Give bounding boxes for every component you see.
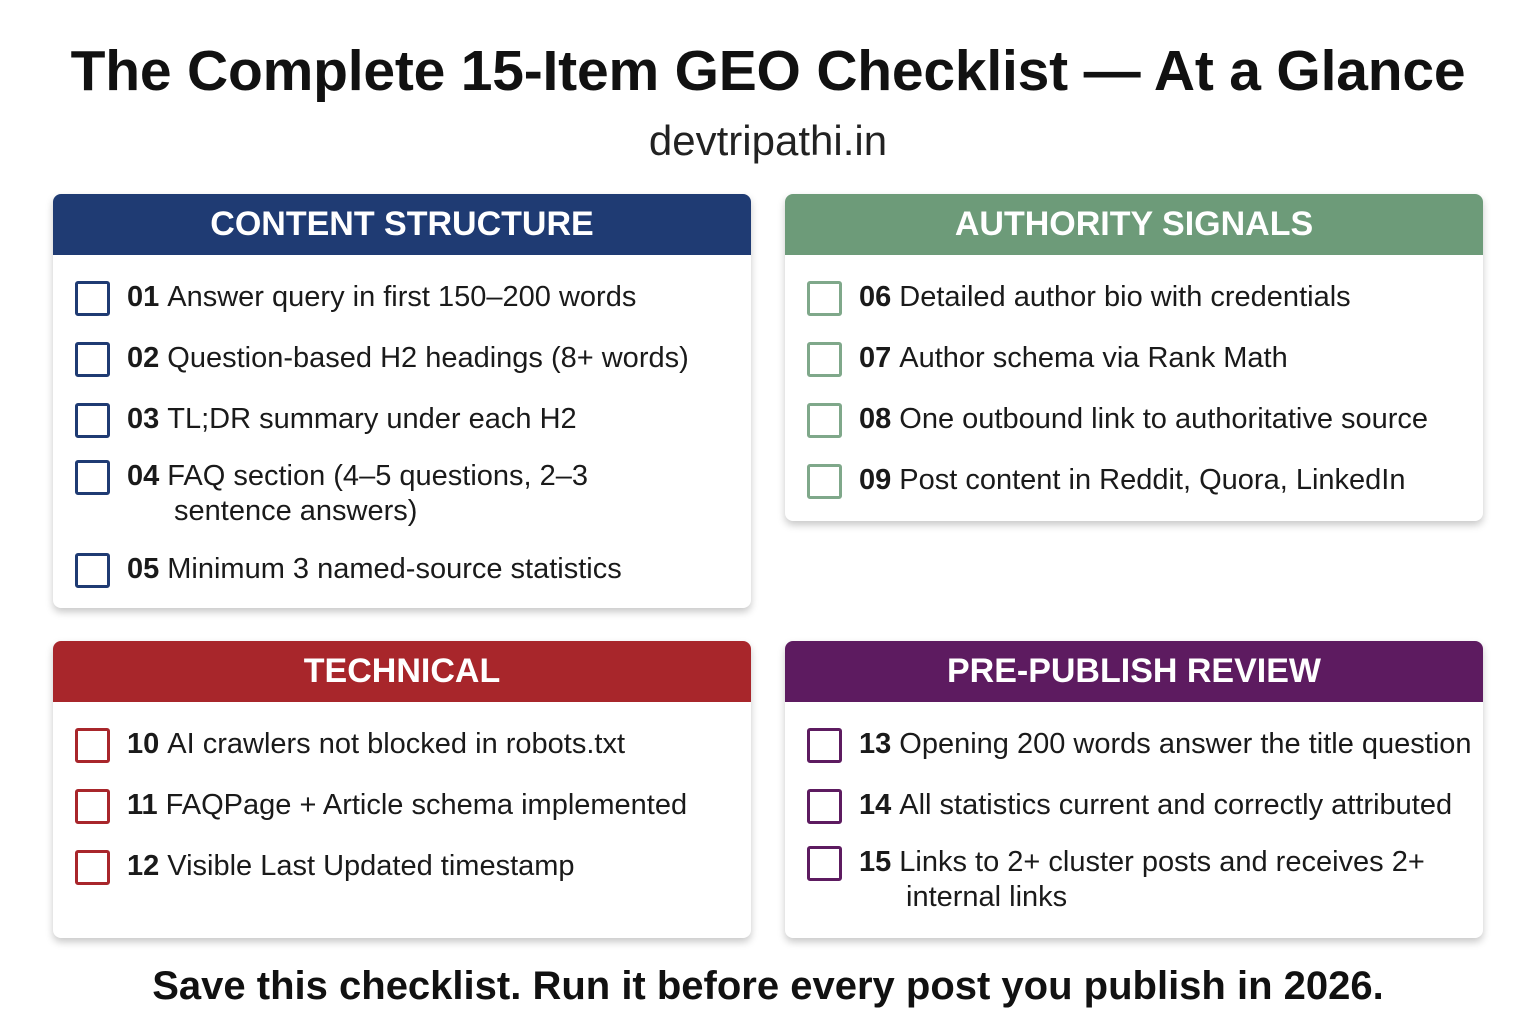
item 03: 03 TL;DR summary under each H2	[127, 403, 577, 435]
item 07: 07 Author schema via Rank Math	[859, 342, 1288, 374]
panel: pre-publish review	[785, 641, 1483, 938]
heading: technical	[53, 641, 751, 702]
item 08: 08 One outbound link to authoritative source	[859, 403, 1428, 435]
item 01: 01 Answer query in first 150–200 words	[127, 281, 636, 313]
item 15: internal links	[906, 881, 1067, 913]
title: The Complete 15-Item GEO Checklist — At a Glance	[71, 39, 1465, 103]
item 06: 06 Detailed author bio with credentials	[859, 281, 1351, 313]
item 04: sentence answers)	[174, 495, 417, 527]
heading: authority signals: AUTHORITY SIGNALS	[955, 205, 1313, 243]
item 09: 09 Post content in Reddit, Quora, LinkedIn	[859, 464, 1405, 496]
footer: Save this checklist. Run it before every post you publish in 2026.	[152, 964, 1384, 1008]
panel: content structure	[53, 194, 751, 608]
item 11: 11 FAQPage + Article schema implemented	[127, 789, 687, 821]
heading: pre-publish review: PRE-PUBLISH REVIEW	[947, 652, 1321, 690]
item 02: 02 Question-based H2 headings (8+ words)	[127, 342, 689, 374]
heading: pre-publish review	[785, 641, 1483, 702]
item 04: 04 FAQ section (4–5 questions, 2–3	[127, 460, 588, 492]
heading: authority signals	[785, 194, 1483, 255]
subtitle: devtripathi.in	[649, 117, 887, 164]
item 05: 05 Minimum 3 named-source statistics	[127, 553, 622, 585]
item 12: 12 Visible Last Updated timestamp	[127, 850, 575, 882]
heading: technical: TECHNICAL	[304, 652, 500, 690]
item 10: 10 AI crawlers not blocked in robots.txt	[127, 728, 625, 760]
heading: content structure	[53, 194, 751, 255]
item 13: 13 Opening 200 words answer the title question	[859, 728, 1472, 760]
item 14: 14 All statistics current and correctly attributed	[859, 789, 1452, 821]
item 15: 15 Links to 2+ cluster posts and receives 2+	[859, 846, 1425, 878]
panel: technical	[53, 641, 751, 938]
panel: authority signals	[785, 194, 1483, 521]
item 15	[807, 846, 1425, 913]
item 04	[75, 460, 588, 527]
heading: content structure: CONTENT STRUCTURE	[210, 205, 594, 243]
